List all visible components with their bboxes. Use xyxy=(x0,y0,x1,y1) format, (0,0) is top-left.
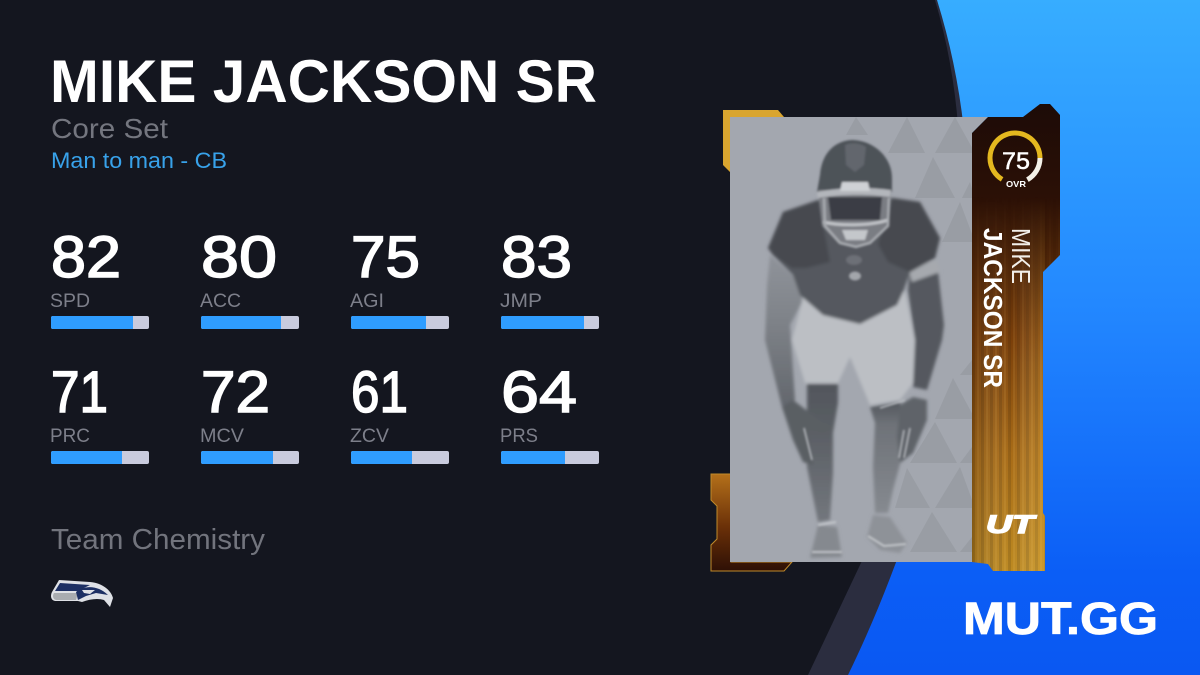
stat: JMP: 83 xyxy=(501,225,572,290)
helmet shell xyxy=(817,140,892,192)
stat: ZCV: 61 xyxy=(351,360,408,425)
stat: PRS: PRS xyxy=(500,426,538,447)
subtitle: set: Core Set xyxy=(51,113,168,144)
card: photo background xyxy=(730,117,988,562)
logo: MUT.GG: MUT.GG xyxy=(963,593,1158,644)
right shoe xyxy=(867,515,907,553)
stat: PRC: PRC xyxy=(50,426,90,447)
card: overall rating ring: OVR xyxy=(1006,179,1026,189)
stat: AGI: 75 xyxy=(351,225,420,290)
stat: MCV: 72 xyxy=(201,360,270,425)
card: overall rating ring xyxy=(990,133,1040,189)
card: UT badge: UT xyxy=(986,511,1038,539)
stat: JMP xyxy=(500,225,599,329)
glove and shoe highlights xyxy=(804,400,910,460)
card: overall rating ring: 75 xyxy=(1002,148,1030,175)
heading: team chemistry: Team Chemistry xyxy=(51,524,265,556)
player card xyxy=(711,100,1062,580)
jersey neck details xyxy=(849,272,861,280)
card: top-left gold bracket xyxy=(723,110,784,172)
shorts xyxy=(792,292,915,405)
card: first name: MIKE xyxy=(1006,228,1036,284)
left glove xyxy=(780,399,810,464)
stat: ACC xyxy=(200,225,299,329)
stat: ZCV xyxy=(350,360,449,464)
card: last name: JACKSON SR xyxy=(978,228,1008,388)
stat: JMP: JMP xyxy=(500,291,542,312)
stat: ZCV: ZCV xyxy=(350,426,389,447)
jersey sleeves xyxy=(768,200,830,268)
stat: MCV: MCV xyxy=(200,426,244,447)
title: MIKE JACKSON SR xyxy=(50,48,597,115)
stat: ACC: 80 xyxy=(201,225,277,290)
right glove xyxy=(897,397,927,463)
icon: seahawks logo xyxy=(51,580,113,607)
card: right name strip xyxy=(972,100,1062,580)
stat: PRC: 71 xyxy=(51,360,108,425)
card: bottom-left bronze bracket xyxy=(711,474,792,571)
stat: SPD xyxy=(50,225,149,329)
left arm xyxy=(765,255,802,407)
stat: SPD: SPD xyxy=(50,291,90,312)
card: background triangles xyxy=(846,117,975,552)
helmet facemask xyxy=(818,190,891,247)
card: player figure xyxy=(765,140,944,558)
stat: AGI xyxy=(350,225,449,329)
stat: PRS: 64 xyxy=(501,360,577,425)
right arm xyxy=(908,262,944,390)
subtitle: archetype: Man to man - CB xyxy=(51,148,227,173)
stat: SPD: 82 xyxy=(51,225,121,290)
right leg xyxy=(870,402,903,513)
left shoe xyxy=(810,525,842,558)
stat: PRC xyxy=(50,360,149,464)
stat: ACC: ACC xyxy=(200,291,241,312)
stat: AGI: AGI xyxy=(350,291,384,312)
background: dark curved panel xyxy=(0,0,960,675)
stat: MCV xyxy=(200,360,299,464)
left leg xyxy=(807,384,838,522)
stat: PRS xyxy=(500,360,599,464)
jersey xyxy=(774,196,911,326)
